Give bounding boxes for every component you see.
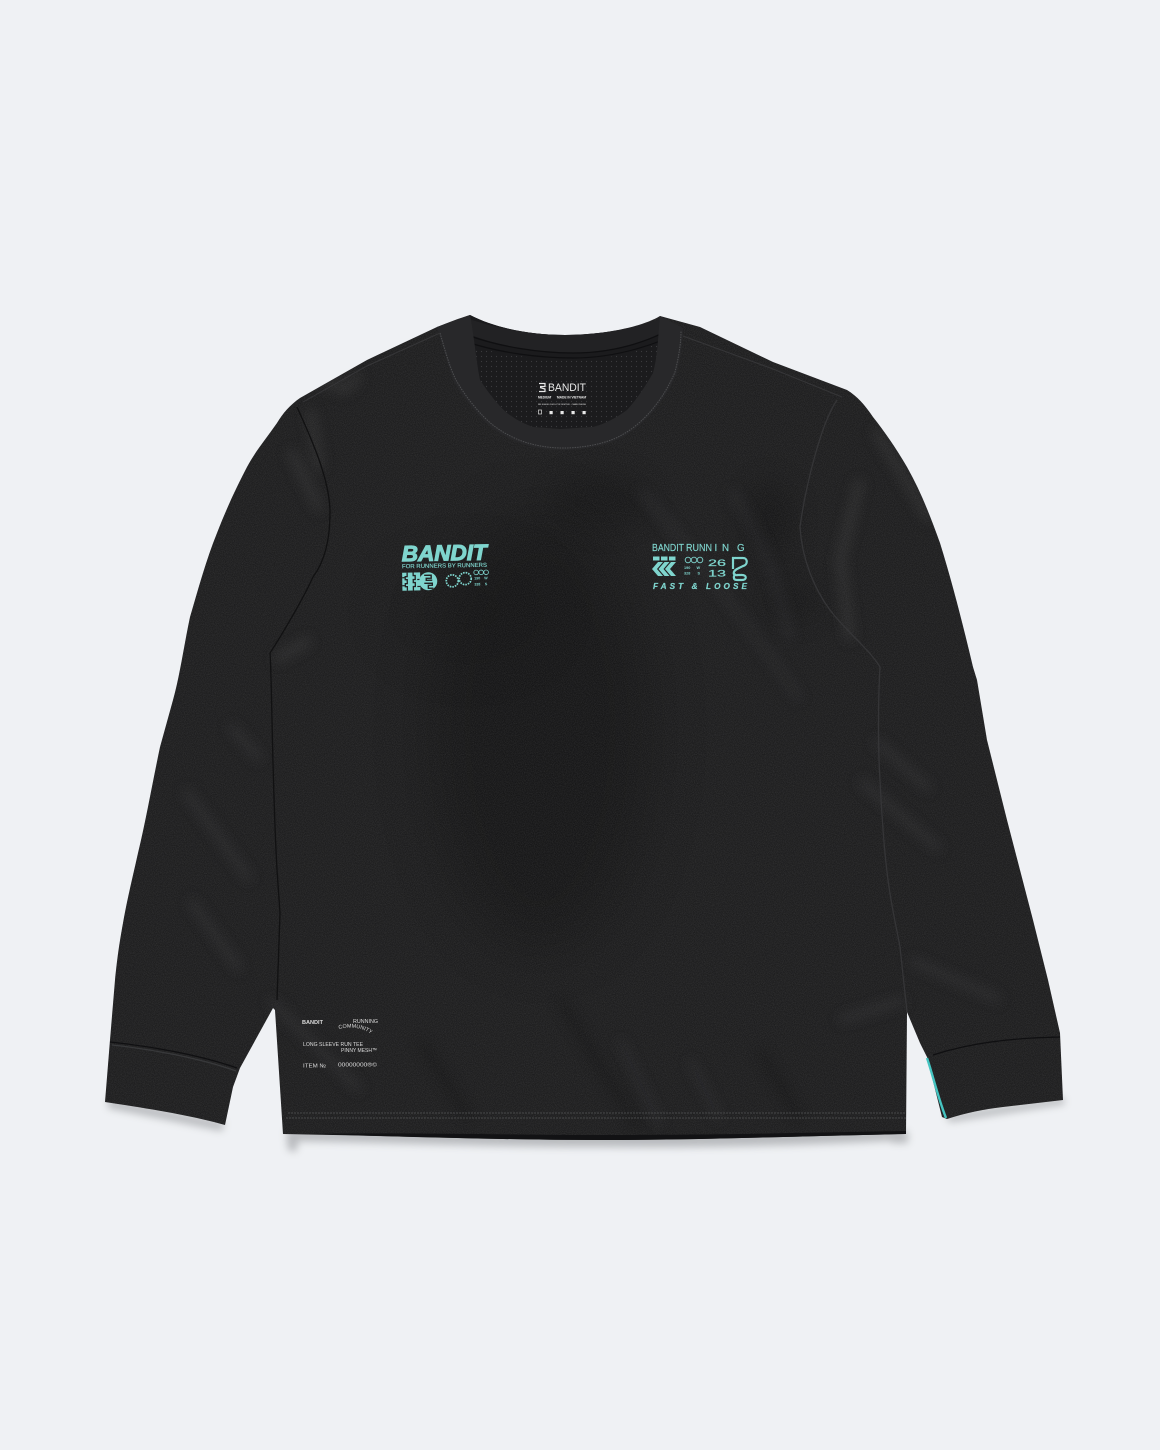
neck label fine print: RN 000000 100% POLYESTER · CARE INSIDE — [538, 403, 587, 406]
teal cuff piping — [927, 1058, 946, 1118]
left chest print — [402, 540, 489, 591]
neck label origin: MADE IN VIETNAM — [557, 396, 586, 400]
print: small numbers: 328 — [684, 572, 690, 576]
shoulder seams — [303, 333, 842, 402]
hem: product name: LONG SLEEVE RUN TEE — [303, 1042, 363, 1048]
back collar tape — [466, 317, 664, 353]
back mesh panel — [467, 342, 663, 429]
garment shadows — [108, 1097, 1065, 1152]
print: BANDIT RUNNING heading: N — [722, 543, 729, 554]
hem: item label: ITEM № — [303, 1064, 326, 1070]
fabric grain — [100, 310, 1070, 1150]
icon: checker wave block — [402, 572, 420, 591]
shirt body and sleeves silhouette — [105, 315, 1063, 1140]
fabric shading and wrinkles — [100, 310, 1070, 1150]
print: small numbers — [474, 576, 488, 586]
product photo: long sleeve tee on pale background — [104, 315, 1067, 1154]
print: small numbers: W — [696, 566, 700, 570]
icon: squiggle logo mark — [733, 558, 747, 580]
print: BANDIT RUNNING heading: RUNN — [686, 543, 712, 554]
hem: brand: BANDIT — [302, 1020, 323, 1026]
icon: round logo badge — [419, 572, 437, 590]
print: small numbers: S — [698, 572, 700, 576]
right chest print — [652, 543, 748, 591]
armhole seams — [270, 400, 907, 1012]
print: small numbers: W — [484, 576, 488, 580]
print: small numbers: 190 — [684, 566, 690, 570]
print: BANDIT RUNNING heading: BANDIT — [652, 543, 684, 554]
print: small numbers: 328 — [474, 582, 480, 586]
hem print — [302, 1019, 378, 1070]
shirt — [100, 310, 1070, 1150]
neck label — [538, 382, 587, 414]
print: tagline: FOR RUNNERS BY RUNNERS — [402, 563, 487, 570]
hem: running: RUNNING — [353, 1019, 378, 1025]
cuff seams — [110, 1037, 1060, 1071]
icon: squares and chevrons — [652, 556, 676, 576]
print: FAST & LOOSE: FAST & LOOSE — [653, 582, 748, 591]
print: small numbers: S — [485, 582, 488, 586]
print: BANDIT RUNNING heading: G — [737, 543, 745, 554]
print: BANDIT wordmark: BANDIT — [402, 540, 489, 566]
hem: item number: 00000000®© — [338, 1062, 378, 1068]
print: BANDIT RUNNING heading: I — [714, 543, 717, 554]
icon: looped circular text — [446, 573, 471, 587]
print: number 13: 13 — [708, 568, 726, 580]
neck label logo mark — [539, 384, 545, 392]
hem fold and stitching — [300, 1131, 906, 1140]
neck label brand: BANDIT — [548, 382, 586, 394]
ribbed collar band — [437, 315, 683, 450]
hem: fabric: PINNY MESH™ — [341, 1048, 377, 1054]
hem: curved community: COMMUNITY — [338, 1024, 373, 1033]
neck label size: MEDIUM — [538, 396, 551, 400]
print: small numbers — [684, 566, 700, 576]
neck interior — [463, 315, 662, 429]
icon: three rings — [685, 557, 703, 563]
print: number 26: 26 — [708, 558, 726, 569]
icon: three small rings — [474, 570, 488, 575]
collar stitching — [440, 331, 681, 448]
print: small numbers: 190 — [474, 576, 480, 580]
neck label care icons — [538, 410, 586, 414]
